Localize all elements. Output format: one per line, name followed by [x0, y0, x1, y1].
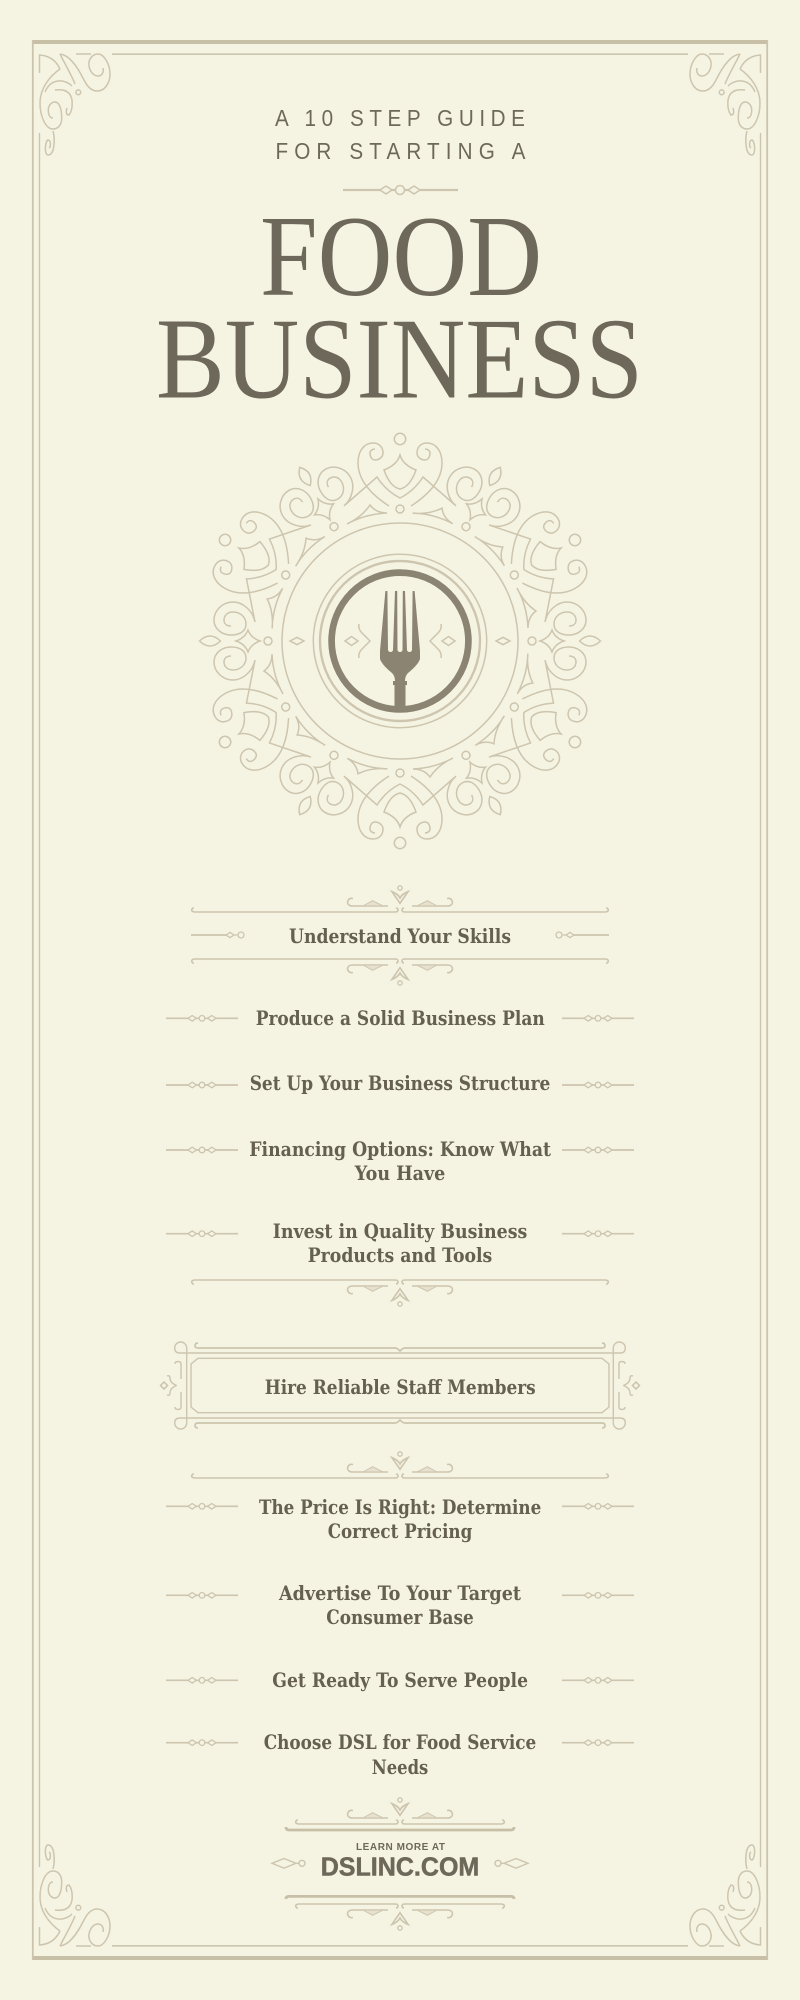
footer call to action: [321, 1842, 479, 1882]
step 7 text: Correct Pricing: [328, 1519, 472, 1543]
step 5 text: Products and Tools: [308, 1243, 492, 1267]
small side diamonds: [290, 637, 510, 645]
title: BUSINESS: [156, 296, 643, 424]
step 5 dividers: [166, 1231, 634, 1236]
footer bar: bottom: [286, 1896, 514, 1899]
step 1 side ornaments: [191, 932, 609, 938]
footer ornament: bottom: [296, 1904, 504, 1930]
subtitle: [275, 105, 526, 164]
step 4 text: [249, 1137, 552, 1185]
step 8 dividers: [166, 1592, 634, 1598]
step 4 text: Financing Options: Know What: [249, 1137, 552, 1161]
step 6 text: Hire Reliable Staff Members: [265, 1375, 536, 1399]
step 8 text: Consumer Base: [326, 1605, 474, 1629]
step 5 text: Invest in Quality Business: [273, 1219, 527, 1243]
ornament above step 7: [192, 1452, 608, 1478]
step 9 dividers: [166, 1678, 634, 1683]
step 2 text: Produce a Solid Business Plan: [256, 1006, 545, 1030]
leaf and diamond scrolls: [200, 448, 600, 834]
footer bar: top: [286, 1827, 514, 1830]
step 7 dividers: [166, 1504, 634, 1509]
step 10 dividers: [166, 1740, 634, 1745]
ornament below step 5: [192, 1280, 608, 1306]
footer ornament: top: [296, 1798, 504, 1824]
title: FOOD: [260, 193, 542, 321]
step 4 dividers: [166, 1147, 634, 1153]
step 3 text: Set Up Your Business Structure: [250, 1071, 550, 1095]
step 9 text: Get Ready To Serve People: [272, 1668, 528, 1692]
step 1 text: Understand Your Skills: [289, 924, 511, 948]
step 10 text: Needs: [372, 1755, 428, 1779]
medallion with fork icon: [193, 433, 607, 849]
concentric rings: [282, 523, 518, 759]
corner ornament: bottom left: [40, 1845, 110, 1946]
plate flourishes: [345, 624, 455, 658]
step 6 ornate frame: [160, 1342, 640, 1429]
step 3 dividers: [166, 1082, 634, 1088]
step 8 text: Advertise To Your Target: [278, 1581, 522, 1605]
footer call to action: LEARN MORE AT: [356, 1842, 445, 1853]
step 7 text: [259, 1495, 541, 1543]
corner ornament: top left: [40, 54, 110, 155]
title: [156, 193, 643, 424]
title divider: [343, 186, 458, 194]
ring of dots and triangles: [256, 497, 544, 785]
footer side ornaments: [272, 1858, 528, 1868]
step 1 ornament: bottom: [192, 959, 608, 985]
step 2 dividers: [166, 1016, 634, 1021]
step 10 text: Choose DSL for Food Service: [264, 1730, 536, 1754]
step 7 text: The Price Is Right: Determine: [259, 1495, 541, 1519]
subtitle: FOR STARTING A: [276, 138, 526, 164]
footer call to action: DSLINC.COM: [321, 1854, 479, 1882]
plate ring: [332, 573, 468, 709]
step 10 text: [264, 1730, 536, 1779]
step 8 text: [278, 1581, 522, 1629]
step 1 ornament: top: [192, 886, 608, 912]
step 5 text: [273, 1219, 527, 1267]
subtitle: A 10 STEP GUIDE: [275, 105, 525, 131]
corner ornament: bottom right: [690, 1845, 760, 1946]
icon: fork: [380, 591, 420, 709]
corner ornament: top right: [690, 54, 760, 155]
step 4 text: You Have: [354, 1161, 445, 1185]
heart scrolls: [193, 433, 607, 849]
